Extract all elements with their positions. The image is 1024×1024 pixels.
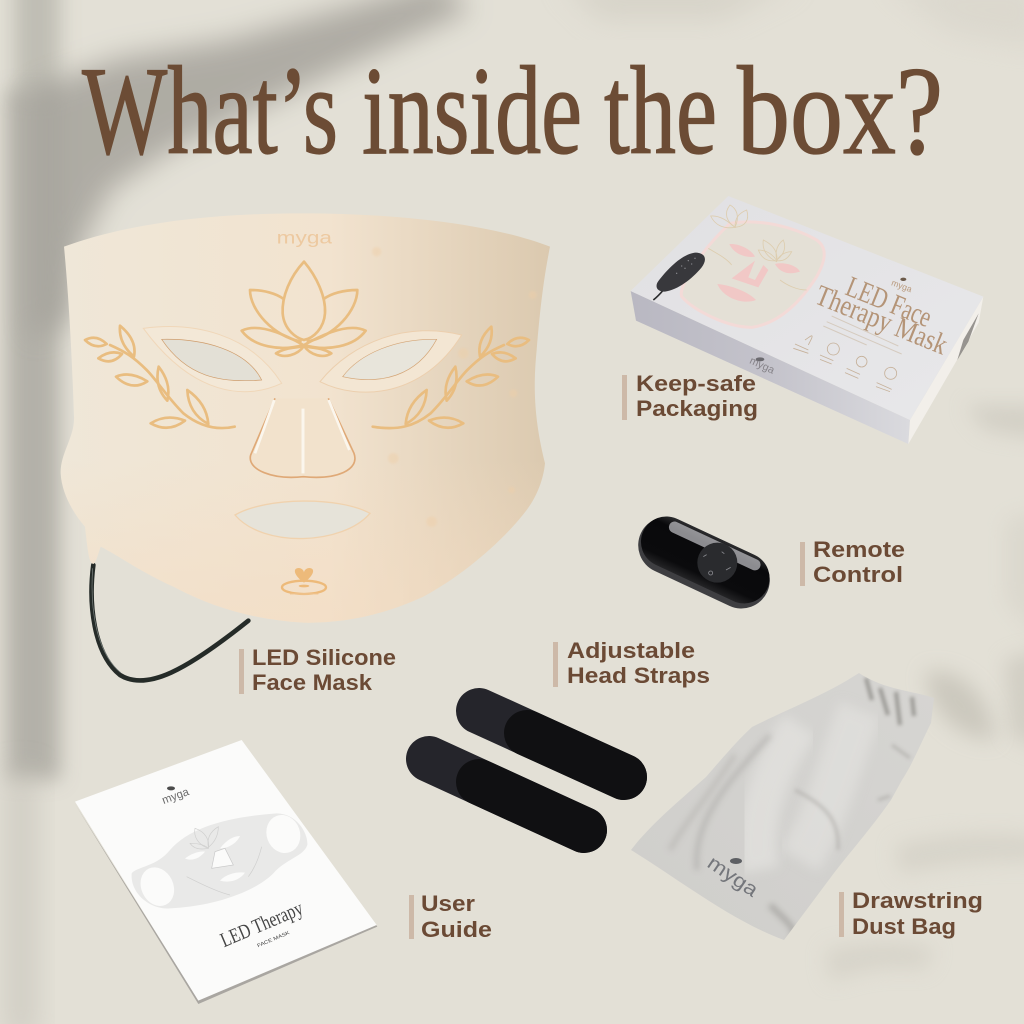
label: keep-safe packaging: Keep-safe [636,371,756,396]
label: LED silicone face mask: Face Mask [252,670,373,695]
label: remote control: Control [813,562,903,587]
title: What’s [82,42,338,181]
label: remote control: Remote [813,537,905,562]
user guide booklet [75,740,377,1004]
guide mask illustration [132,813,307,908]
lotus [242,262,366,356]
box feature icons [793,336,897,392]
LED glow dots [372,247,537,527]
right eye opening [320,331,462,392]
label: keep-safe packaging: Packaging [636,396,758,421]
label: user guide: User [421,891,475,916]
label: adjustable head straps: Head Straps [567,663,710,688]
label: drawstring dust bag: Dust Bag [852,914,956,939]
label: adjustable head straps [553,638,710,688]
box title: Therapy Mask [811,279,952,361]
mask cord [92,565,248,681]
box logo: myga [890,278,914,294]
box remote image [653,253,705,300]
box fine print lines [823,316,902,354]
title: the [604,42,717,181]
label: LED silicone face mask [239,645,396,695]
remote control [629,508,779,618]
label: drawstring dust bag [839,888,983,939]
bag logo: myga [703,852,763,902]
title [82,42,943,181]
remote dial [697,543,737,583]
strap two [429,759,584,830]
LED silicone face mask [61,213,550,623]
box title: LED Face [841,271,936,334]
box front side [631,291,910,444]
head straps [429,711,624,830]
drawstring dust bag [631,673,934,945]
box side logo: myga [748,355,776,377]
nose opening [250,398,355,477]
guide subtitle: FACE MASK [256,930,291,949]
left eye opening [143,327,282,392]
label: keep-safe packaging [622,371,758,421]
label: user guide [409,891,492,942]
left laurel branch [85,326,235,428]
box title [811,271,952,361]
box mask image [681,222,824,327]
label: adjustable head straps: Adjustable [567,638,695,663]
strap one [479,711,624,777]
guide logo: myga [161,786,191,807]
box end [908,297,983,444]
myga logo: myga [277,227,332,247]
title: box? [737,42,943,181]
packaging box [631,196,983,444]
remote gloss [667,520,762,572]
box top [631,196,983,420]
bag folds [670,678,914,945]
label: remote control [800,537,905,587]
right laurel branch [373,327,529,428]
title: inside [362,42,582,181]
mouth opening [235,501,370,539]
icon: heart logo [282,568,326,594]
guide title: LED Therapy [217,897,307,952]
label: user guide: Guide [421,917,492,942]
label: drawstring dust bag: Drawstring [852,888,983,913]
label: LED silicone face mask: LED Silicone [252,645,396,670]
